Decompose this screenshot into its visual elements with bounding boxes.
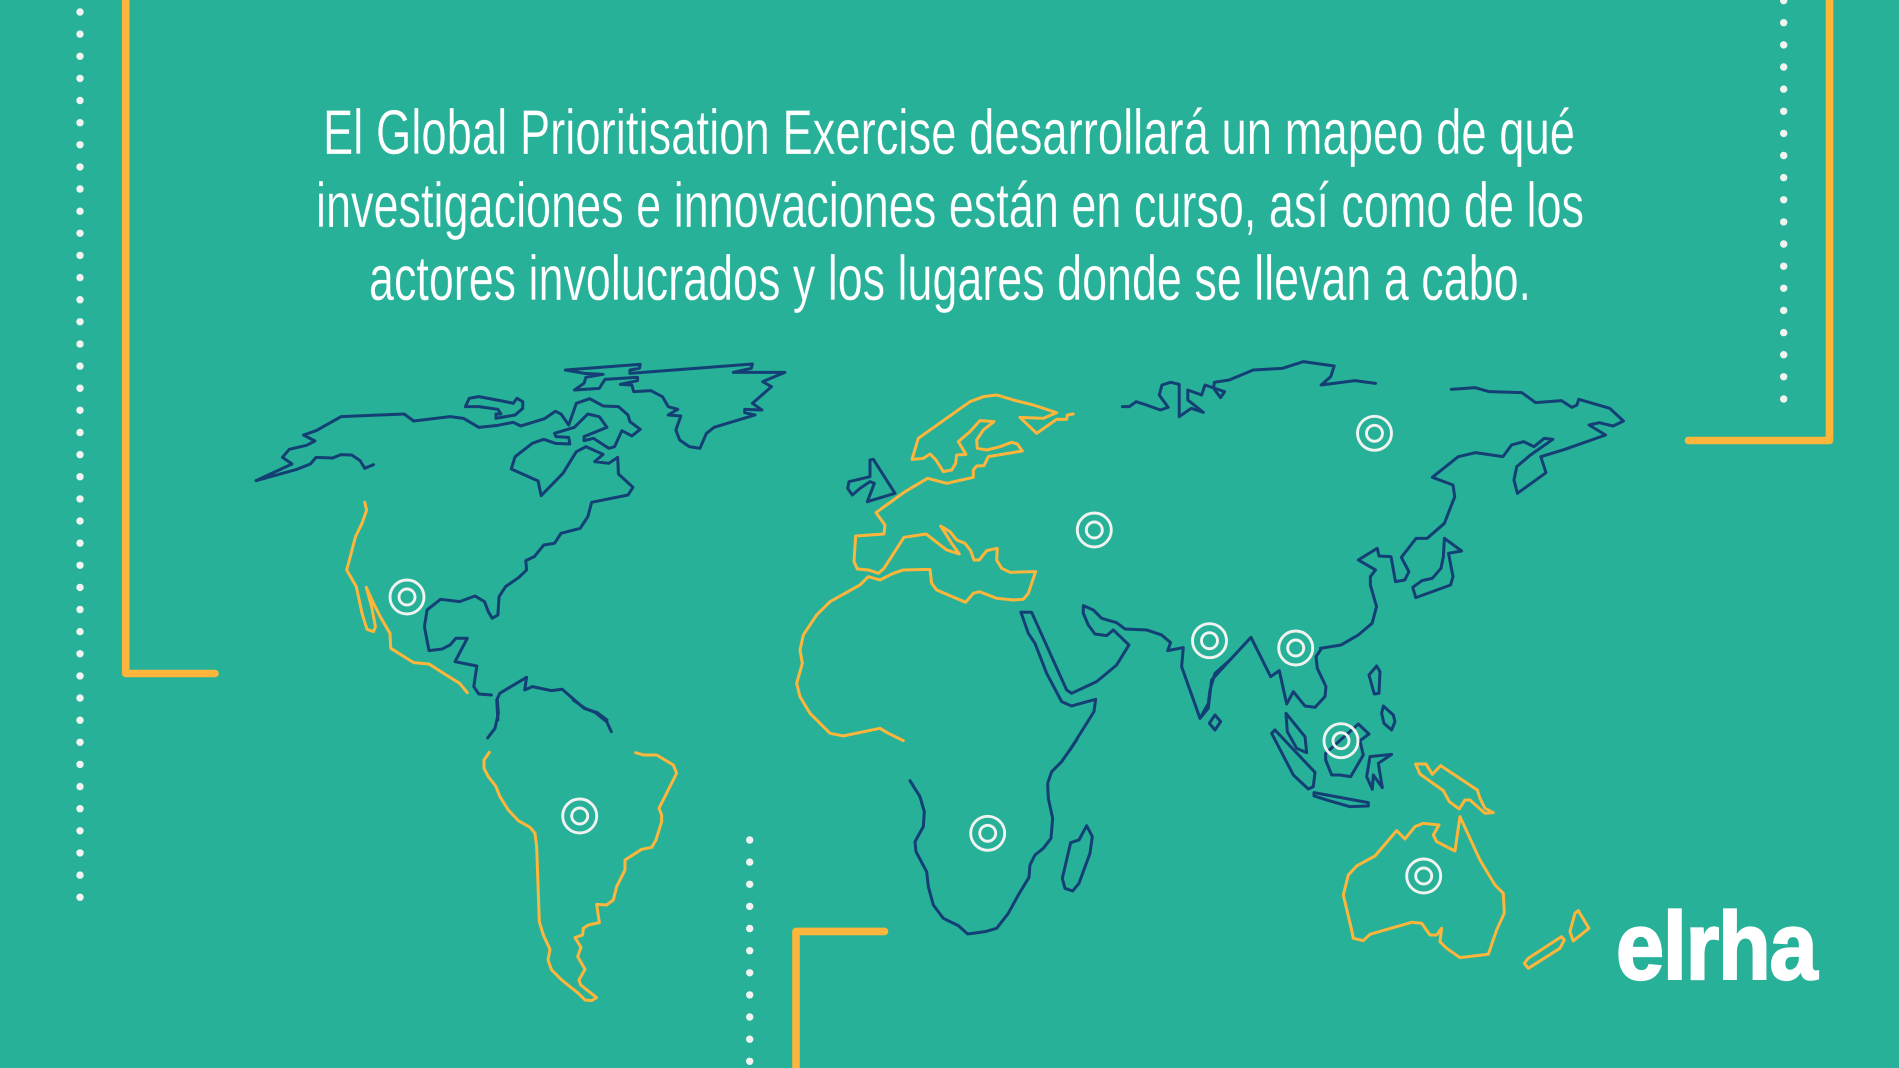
heading text [316, 98, 1584, 314]
map: South America [484, 752, 677, 1001]
map: Asia, Russia and Japan [1122, 362, 1623, 648]
dotted line: bottom centre [746, 836, 753, 1065]
corner bracket: top left [126, 0, 215, 674]
marker: Brazil [563, 799, 597, 833]
dotted line: left [76, 8, 84, 901]
marker: China [1279, 631, 1313, 665]
dotted line: right [1780, 0, 1787, 403]
corner bracket: bottom centre [796, 931, 884, 1068]
marker: India [1192, 624, 1226, 658]
marker: Indonesia [1324, 724, 1358, 758]
marker: Australia [1407, 859, 1441, 893]
map: location markers [390, 416, 1441, 893]
marker: Russia [1358, 416, 1392, 450]
map: North American west coast [347, 502, 467, 693]
marker: southern Africa [971, 816, 1005, 850]
map: North America and Greenland [256, 364, 785, 720]
marker: Central Asia [1077, 513, 1111, 547]
corner bracket: top right [1688, 0, 1830, 440]
map: northern South America coast [488, 700, 611, 738]
map: Southeast Asia and islands [1200, 637, 1395, 807]
map: British Isles, Arabia and East Africa [848, 459, 1230, 750]
map: southern Africa and Madagascar [910, 740, 1092, 934]
map: Australia, Papua New Guinea and New Zealand [1343, 764, 1589, 968]
world map [256, 362, 1623, 1001]
logo: elrha: elrha [1616, 893, 1819, 1000]
marker: Mexico [390, 580, 424, 614]
map: Europe and North Africa [797, 395, 1073, 741]
